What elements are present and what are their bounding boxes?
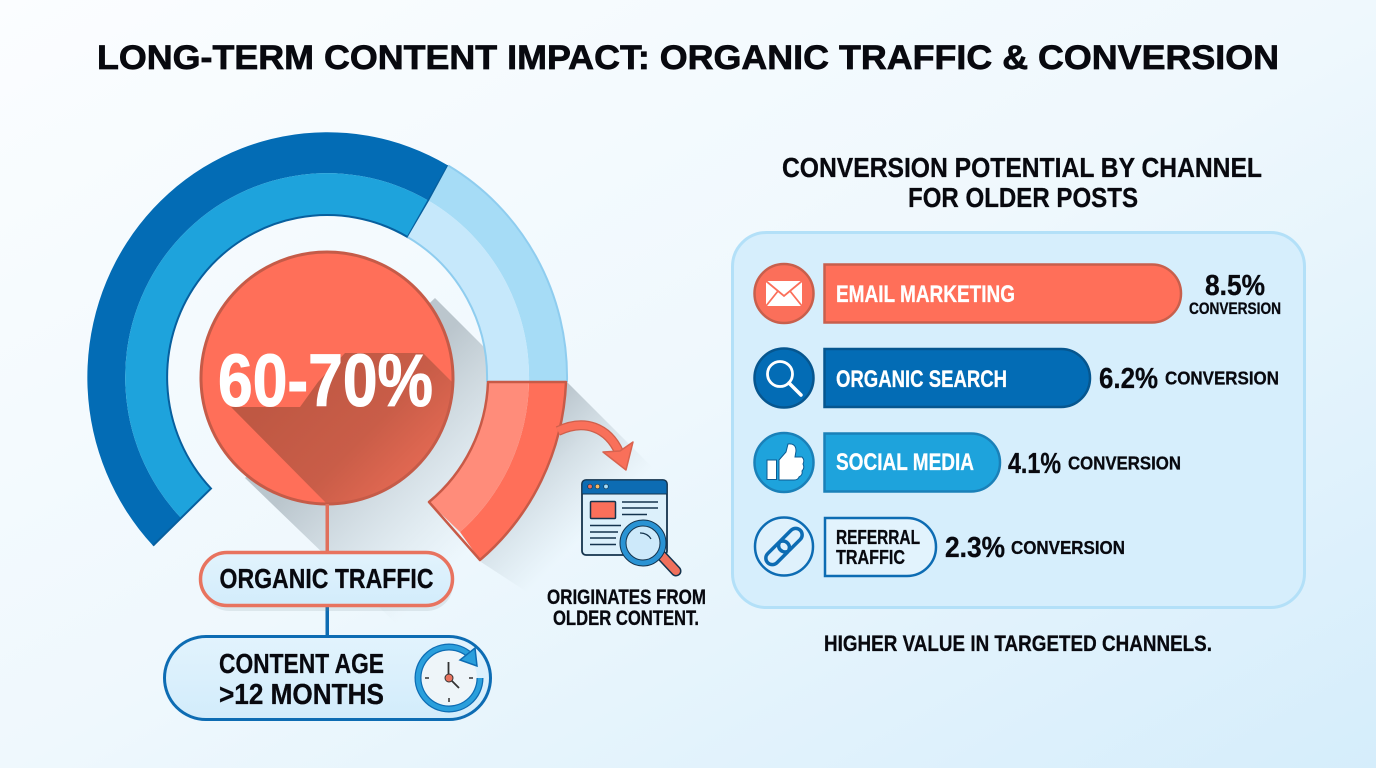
icon: clock xyxy=(418,647,480,709)
light blue arc inner band xyxy=(408,201,529,382)
heading: conversion potential: CONVERSION POTENTIAL BY CHANNEL xyxy=(782,152,1262,183)
icon: document with magnifier xyxy=(582,480,676,571)
row: email marketing: CONVERSION xyxy=(1189,300,1281,318)
heading: conversion potential: FOR OLDER POSTS xyxy=(908,182,1138,213)
icon: envelope xyxy=(754,264,814,323)
row: organic search: 6.2% xyxy=(1099,363,1158,395)
row: email marketing: 8.5% xyxy=(1205,270,1265,302)
red segment long shadow xyxy=(481,382,700,630)
row: social media: 4.1% xyxy=(1008,448,1061,480)
row: referral traffic: CONVERSION xyxy=(1011,537,1125,558)
pill: content age xyxy=(164,636,490,720)
red arc segment xyxy=(429,382,566,560)
heading: conversion potential xyxy=(782,152,1262,213)
row: referral traffic xyxy=(755,518,1125,576)
row: email marketing: EMAIL MARKETING xyxy=(836,281,1015,308)
panel: channel conversion bars xyxy=(732,232,1304,608)
icon: magnifier xyxy=(754,348,814,408)
row: social media: SOCIAL MEDIA xyxy=(836,449,974,476)
row: referral traffic: 2.3% xyxy=(945,532,1005,564)
blue arc edge xyxy=(153,166,448,546)
pill: content age: >12 MONTHS xyxy=(219,679,384,711)
connector: organic traffic to content age xyxy=(326,606,329,636)
caption: originates from older content: ORIGINATES FROM xyxy=(547,586,706,609)
row: organic search xyxy=(754,348,1279,408)
row: social media xyxy=(754,433,1181,492)
row: organic search: CONVERSION xyxy=(1165,368,1279,388)
light blue arc outer band xyxy=(429,166,567,382)
caption: originates from older content xyxy=(547,586,706,630)
circle inner text shadow xyxy=(231,353,460,504)
row: referral traffic: TRAFFIC xyxy=(836,546,905,569)
big percentage: 60-70% xyxy=(218,339,433,422)
light blue arc edge xyxy=(408,166,567,382)
pill: organic traffic: ORGANIC TRAFFIC xyxy=(220,563,434,594)
icon: chain link xyxy=(755,518,813,576)
pill: content age: CONTENT AGE xyxy=(219,648,384,679)
panel: organic traffic gauge xyxy=(87,132,636,579)
connector: circle to organic traffic xyxy=(326,504,329,552)
mid blue arc band xyxy=(125,173,429,517)
row: social media: CONVERSION xyxy=(1068,452,1181,474)
row: organic search: ORGANIC SEARCH xyxy=(836,366,1007,393)
icon: thumbs up xyxy=(754,433,814,492)
caption: originates from older content: OLDER CONTENT. xyxy=(553,607,699,630)
pill: organic traffic xyxy=(200,552,453,611)
center circle xyxy=(201,252,460,504)
dark blue arc band xyxy=(87,132,448,546)
footnote: HIGHER VALUE IN TARGETED CHANNELS. xyxy=(824,631,1212,656)
title: LONG-TERM CONTENT IMPACT: ORGANIC TRAFFIC & CONVERSION xyxy=(97,39,1279,77)
row: referral traffic: REFERRAL xyxy=(836,526,920,549)
row: email marketing xyxy=(754,264,1281,323)
circle long shadow xyxy=(245,298,700,743)
arrow: segment to document xyxy=(558,425,633,470)
